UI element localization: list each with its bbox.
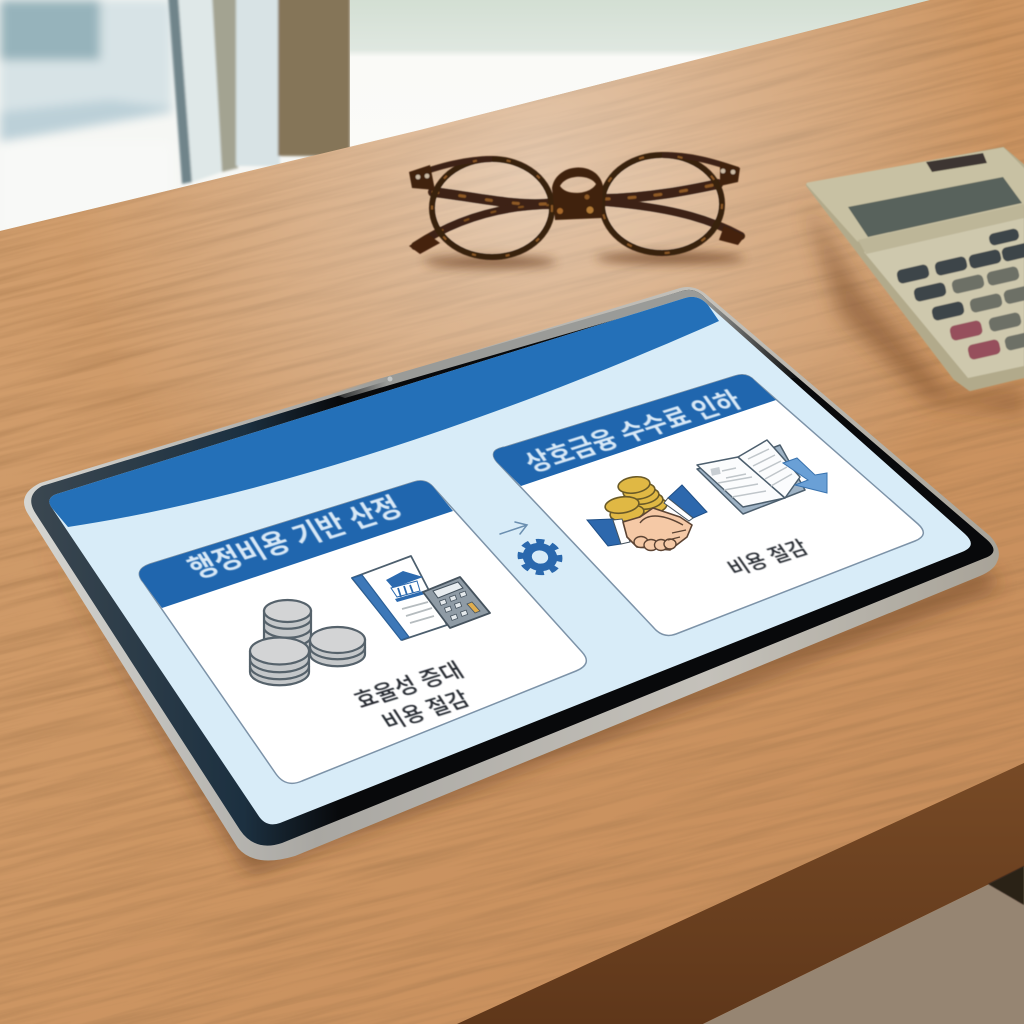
bank symbol [386, 571, 425, 602]
tablet bezel [31, 290, 993, 846]
hands [623, 508, 692, 550]
gold coin stacks [604, 475, 668, 529]
tablet silver edge [24, 287, 999, 860]
back stack [264, 600, 311, 656]
calculator shadow [805, 200, 1024, 412]
camera dot [388, 376, 392, 382]
icon: gear [517, 540, 563, 574]
heading: 행정비용 기반 산정 [183, 492, 407, 584]
calculator [808, 149, 1024, 389]
icon: handshake with gold coins [587, 475, 707, 550]
icon: open book with down arrow [697, 440, 827, 514]
left stack [250, 638, 309, 685]
bridge [552, 167, 603, 220]
tablet shadow [40, 540, 1000, 872]
solar strip [926, 153, 987, 172]
glasses [409, 154, 745, 258]
cuffs [587, 519, 621, 546]
glasses shadow [424, 252, 744, 268]
panel: 행정비용 기반 산정 [139, 481, 586, 783]
calculator keys [896, 228, 1024, 360]
screen blue banner [49, 297, 719, 527]
right stack [310, 627, 365, 666]
down arrow [783, 458, 827, 493]
panel header [493, 375, 776, 486]
body text: 비용 절감 [724, 537, 813, 580]
heading: 상호금융 수수료 인하 [519, 386, 747, 477]
body text: 효율성 증대 [349, 658, 468, 713]
window background [0, 0, 1024, 300]
temple arms [415, 184, 741, 246]
icon: bank ledger and calculator [352, 556, 490, 640]
desk front face and floor [457, 763, 1024, 1024]
display [848, 177, 1022, 237]
small calculator [423, 577, 490, 628]
panel: 상호금융 수수료 인하 [493, 375, 923, 635]
lens tint [432, 158, 552, 258]
body text line 2: 비용 절감 [378, 687, 474, 734]
icon: silver coin stacks [250, 600, 365, 685]
screen [49, 297, 971, 824]
arrow between panels [500, 522, 527, 534]
tablet [24, 287, 999, 860]
lens rims [432, 159, 552, 257]
panel header [139, 481, 453, 608]
temple tips [409, 234, 440, 254]
hinges [409, 165, 435, 190]
bezel reflection [330, 290, 800, 398]
